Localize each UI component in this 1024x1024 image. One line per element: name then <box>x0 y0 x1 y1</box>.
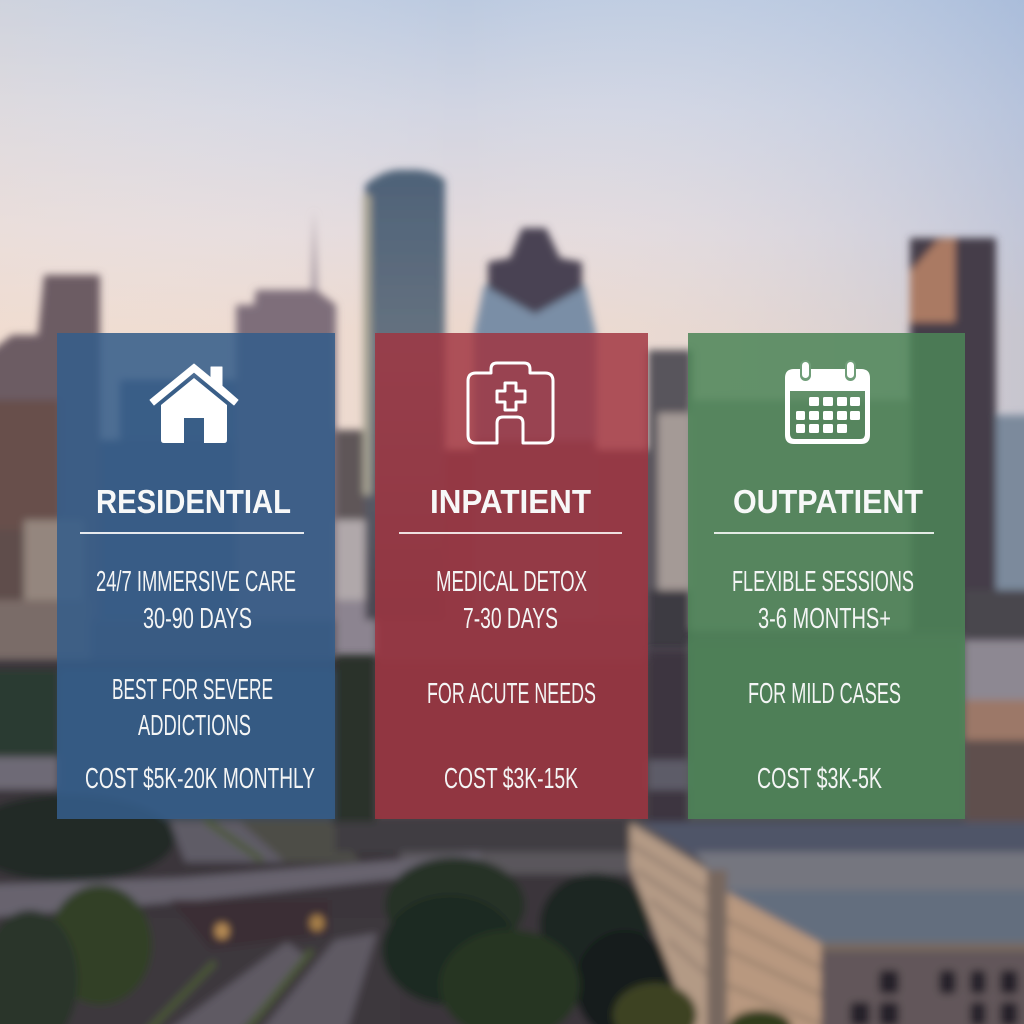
residential details: BEST FOR SEVERE <box>112 674 273 706</box>
outpatient details: 3-6 MONTHS+ <box>758 603 891 635</box>
residential details: 24/7 IMMERSIVE CARE <box>96 566 296 598</box>
residential details: 30-90 DAYS <box>143 603 252 635</box>
inpatient details: 7-30 DAYS <box>463 603 558 635</box>
outpatient details: FLEXIBLE SESSIONS <box>732 566 914 598</box>
heading: residential: RESIDENTIAL <box>96 483 291 520</box>
panel: inpatient <box>375 333 648 819</box>
outpatient details: FOR MILD CASES <box>748 678 901 710</box>
inpatient details <box>427 566 596 795</box>
icon: hospital <box>468 363 553 443</box>
inpatient details: FOR ACUTE NEEDS <box>427 678 596 710</box>
outpatient details: COST $3K-5K <box>757 763 882 795</box>
heading: inpatient: INPATIENT <box>430 483 591 520</box>
inpatient details: COST $3K-15K <box>444 763 578 795</box>
residential details <box>85 566 315 795</box>
outpatient details <box>732 566 914 795</box>
inpatient details: MEDICAL DETOX <box>436 566 587 598</box>
residential details: COST $5K-20K MONTHLY <box>85 763 315 795</box>
panel: residential <box>57 333 335 819</box>
icon: calendar <box>785 360 870 444</box>
residential details: ADDICTIONS <box>138 710 251 742</box>
heading: outpatient: OUTPATIENT <box>733 483 923 520</box>
icon: house <box>150 364 238 443</box>
panel: outpatient <box>688 333 965 819</box>
